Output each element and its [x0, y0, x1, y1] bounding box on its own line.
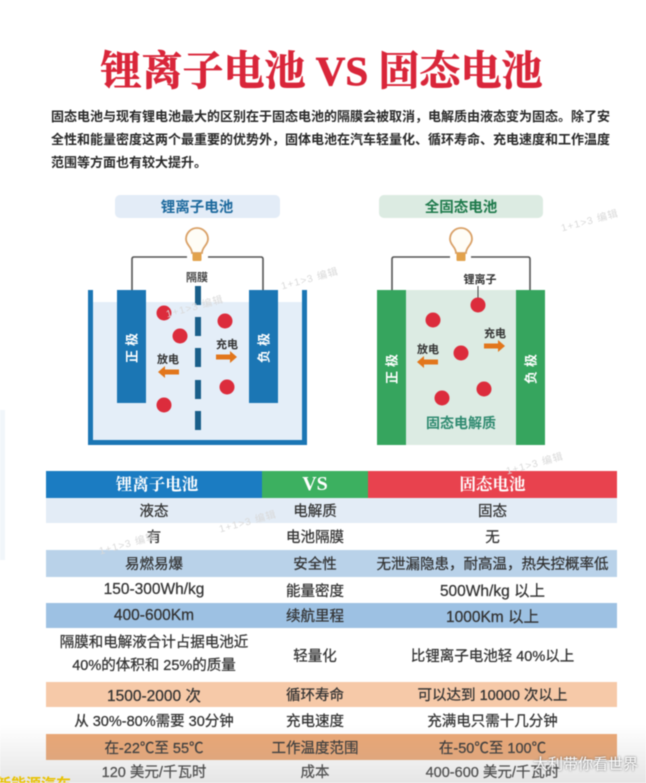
separator label: 隔膜	[186, 270, 208, 284]
row: light weight: 比锂离子电池轻 40%以上	[411, 648, 574, 664]
watermarks: 1+1>3 编辑	[98, 531, 158, 557]
row: energy density: 150-300Wh/kg	[104, 581, 204, 598]
icon: light bulb	[186, 228, 208, 261]
row: safety: 易燃易爆	[125, 557, 183, 573]
row: charge speed: 充电速度	[286, 714, 344, 730]
charge label and arrow	[484, 326, 506, 352]
table header: 固态电池	[460, 475, 526, 494]
positive electrode: 正极	[384, 350, 400, 384]
row: charge speed: 充满电只需十几分钟	[427, 714, 558, 730]
row: safety: 安全性	[293, 557, 337, 573]
row: light weight: 40%的体积和 25%的质量	[72, 658, 236, 674]
title: 锂离子电池 VS 固态电池	[101, 48, 542, 94]
row: electrolyte: 固态	[478, 504, 507, 520]
circuit wire	[392, 257, 530, 290]
heading pill: solid-state battery: 全固态电池	[425, 198, 498, 216]
row: cycle life	[46, 682, 617, 707]
watermarks: 1+1>3 编辑	[280, 266, 340, 292]
tank liquid	[93, 302, 302, 440]
negative electrode: 负极	[256, 329, 272, 363]
positive electrode	[377, 290, 406, 445]
tank walls	[90, 290, 304, 442]
watermarks: 1+1>3 编辑	[218, 509, 278, 535]
heading pill: solid-state battery	[379, 195, 543, 218]
intro paragraph: 全性和能量密度这两个最重要的优势外，固体电池在汽车轻量化、循环寿命、充电速度和工作温度	[51, 132, 610, 147]
row: cycle life: 1500-2000 次	[107, 688, 201, 704]
row: separator: 有	[147, 530, 161, 546]
row: light weight	[60, 633, 574, 674]
left edge tint	[0, 410, 5, 560]
negative electrode	[516, 290, 545, 445]
row: operating temperature	[46, 734, 617, 760]
solid electrolyte	[406, 290, 516, 445]
positive electrode	[117, 290, 146, 403]
channel watermark: 大利带你看世界	[533, 756, 638, 773]
row: cost: 成本	[300, 765, 330, 781]
lithium ion label: 锂离子	[464, 272, 496, 286]
negative electrode: 负极	[524, 350, 538, 384]
row: cost: 120 美元/千瓦时	[102, 765, 206, 781]
discharge label and arrow	[417, 342, 439, 368]
watermarks: 1+1>3 编辑	[560, 208, 620, 234]
table header	[45, 470, 618, 499]
discharge label and arrow	[157, 352, 179, 378]
table header: 锂离子电池	[116, 475, 198, 494]
charge label and arrow: 充电	[484, 326, 506, 340]
watermarks: 1+1>3 编辑	[505, 451, 565, 477]
row: operating temperature: 在-22℃至 55℃	[104, 740, 204, 756]
row: range: 1000Km 以上	[446, 608, 539, 626]
lithium ion label	[464, 272, 496, 300]
intro paragraph: 固态电池与现有锂电池最大的区别在于固态电池的隔膜会被取消，电解质由液态变为固态。除了安	[51, 109, 610, 124]
row: safety: 无泄漏隐患，耐高温，热失控概率低	[376, 557, 608, 573]
row: operating temperature: 在-50℃至 100℃	[439, 740, 546, 756]
row: cost: 400-600 美元/千瓦时	[426, 765, 559, 781]
row: energy density: 能量密度	[286, 584, 344, 600]
row: electrolyte	[46, 498, 617, 523]
separator membrane	[195, 286, 201, 430]
row: light weight: 隔膜和电解液合计占据电池近	[60, 635, 248, 651]
diagram: solid-state battery	[376, 194, 546, 446]
row: energy density	[104, 581, 546, 600]
icon: light bulb	[450, 228, 472, 261]
solid electrolyte: 固态电解质	[426, 415, 496, 431]
negative electrode	[249, 290, 278, 403]
row: cycle life: 循环寿命	[286, 688, 344, 704]
row: electrolyte: 电解质	[293, 504, 337, 520]
row: separator: 电池隔膜	[286, 530, 344, 546]
row: charge speed	[74, 712, 558, 730]
heading pill: lithium-ion battery	[115, 195, 280, 218]
charge label and arrow: 充电	[216, 337, 238, 351]
row: energy density: 500Wh/kg 以上	[440, 583, 545, 600]
row: operating temperature: 工作温度范围	[272, 740, 358, 756]
row: cycle life: 可以达到 10000 次以上	[418, 688, 567, 704]
row: range: 400-600Km	[114, 606, 194, 624]
charge label and arrow	[216, 337, 238, 363]
row: separator: 无	[485, 530, 500, 546]
circuit wire	[132, 257, 263, 290]
row: electrolyte: 液态	[140, 504, 168, 520]
diagram: lithium-ion battery	[87, 194, 308, 446]
intro paragraph	[50, 108, 610, 170]
row: cost	[102, 764, 560, 781]
row: charge speed: 从 30%-80%需要 30分钟	[74, 714, 234, 730]
lithium ions	[426, 298, 492, 406]
discharge label and arrow: 放电	[157, 352, 179, 366]
row: light weight: 轻量化	[293, 648, 337, 664]
positive electrode: 正极	[124, 329, 140, 363]
row: range	[46, 603, 617, 628]
watermarks: 1+1>3 编辑	[165, 294, 225, 320]
row: range: 续航里程	[286, 609, 344, 625]
row: safety	[46, 550, 617, 577]
table header: VS	[302, 473, 328, 495]
intro paragraph: 范围等方面也有较大提升。	[51, 155, 207, 170]
lithium ions	[156, 306, 234, 412]
bottom video fade	[0, 725, 646, 783]
discharge label and arrow: 放电	[417, 342, 439, 356]
row: separator	[146, 528, 500, 546]
heading pill: lithium-ion battery: 锂离子电池	[161, 198, 234, 216]
comparison table	[45, 470, 618, 781]
